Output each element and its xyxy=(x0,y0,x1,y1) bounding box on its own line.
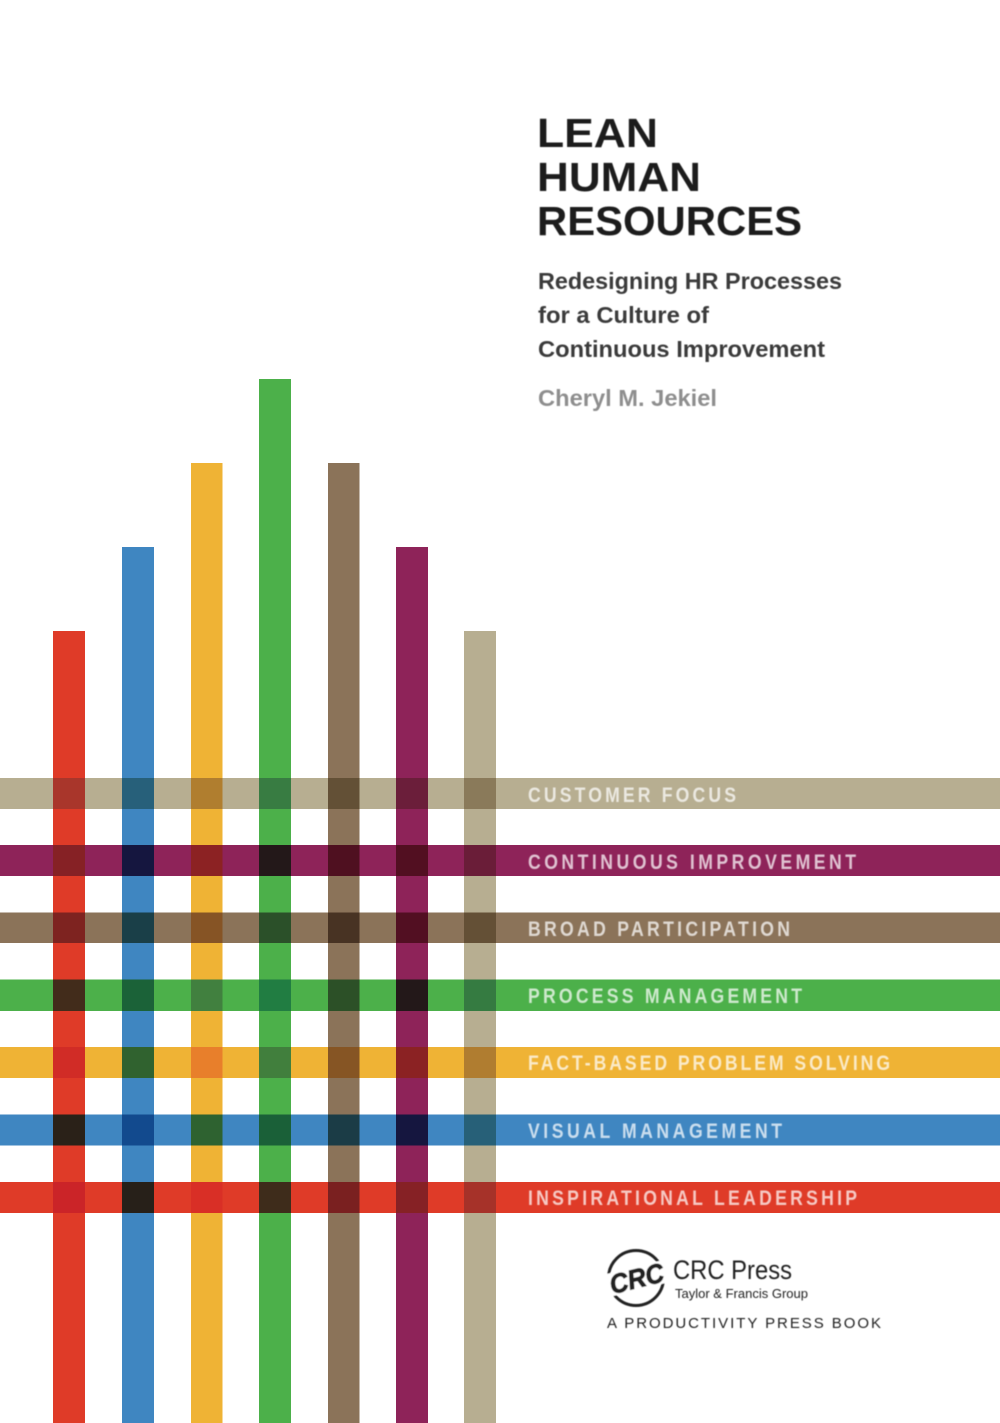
bar labels: CUSTOMER FOCUS xyxy=(528,784,736,807)
bar labels xyxy=(528,784,890,1210)
bar crossings xyxy=(53,778,496,1213)
bar labels: CONTINUOUS IMPROVEMENT xyxy=(528,851,856,874)
imprint line: A PRODUCTIVITY PRESS BOOK xyxy=(607,1315,881,1332)
icon: CRC seal: CRC xyxy=(606,1258,667,1300)
vertical bars xyxy=(53,379,496,1423)
title: HUMAN xyxy=(537,154,701,200)
title block xyxy=(537,110,842,411)
publisher logo xyxy=(604,1250,881,1332)
publisher group: Taylor & Francis Group xyxy=(675,1286,808,1301)
horizontal bars xyxy=(0,778,1000,1213)
bar labels: PROCESS MANAGEMENT xyxy=(528,985,802,1008)
author: Cheryl M. Jekiel xyxy=(538,385,717,411)
bar labels: VISUAL MANAGEMENT xyxy=(528,1120,782,1143)
subtitle: for a Culture of xyxy=(538,302,709,328)
woven stripe graphic xyxy=(0,379,1000,1423)
subtitle: Redesigning HR Processes xyxy=(538,268,842,294)
subtitle: Continuous Improvement xyxy=(538,336,825,362)
bar labels: BROAD PARTICIPATION xyxy=(528,918,790,941)
title xyxy=(537,110,802,244)
subtitle xyxy=(538,268,842,362)
bar labels: FACT-BASED PROBLEM SOLVING xyxy=(528,1052,890,1075)
title: LEAN xyxy=(537,110,658,156)
title: RESOURCES xyxy=(537,198,802,244)
publisher name: CRC Press xyxy=(673,1255,792,1285)
bar labels: INSPIRATIONAL LEADERSHIP xyxy=(528,1187,857,1210)
